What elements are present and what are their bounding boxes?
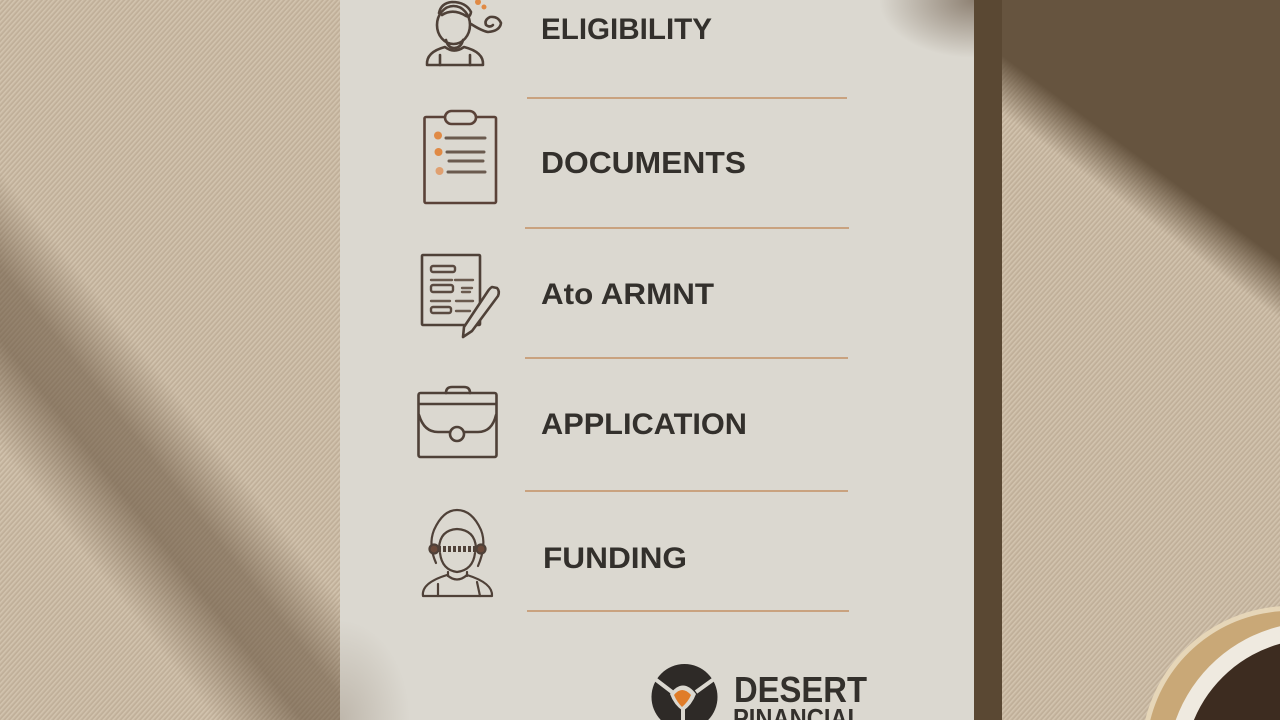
label: documents: DOCUMENTS (541, 145, 746, 180)
label: agreement: Ato ARMNT (541, 278, 714, 311)
logo wordmark: DESERT (734, 669, 867, 710)
icon: funding agent with headset (423, 510, 492, 596)
left diagonal window shadow (0, 0, 340, 720)
label: eligibility: ELIGIBILITY (541, 13, 712, 46)
dark shadow strip beside paper (974, 0, 1002, 720)
icon: clipboard checklist (424, 111, 496, 203)
icon: agreement page and pen (422, 255, 499, 337)
paper sheet panel (340, 0, 974, 720)
icon: eligibility person (427, 0, 501, 65)
top right diagonal shadow (1002, 0, 1280, 320)
label: application: APPLICATION (541, 408, 747, 441)
logo mark (652, 664, 718, 720)
divider lines (525, 97, 849, 612)
coffee cup in corner (1145, 606, 1280, 720)
label: funding: FUNDING (543, 542, 687, 575)
icon: briefcase (418, 387, 496, 457)
